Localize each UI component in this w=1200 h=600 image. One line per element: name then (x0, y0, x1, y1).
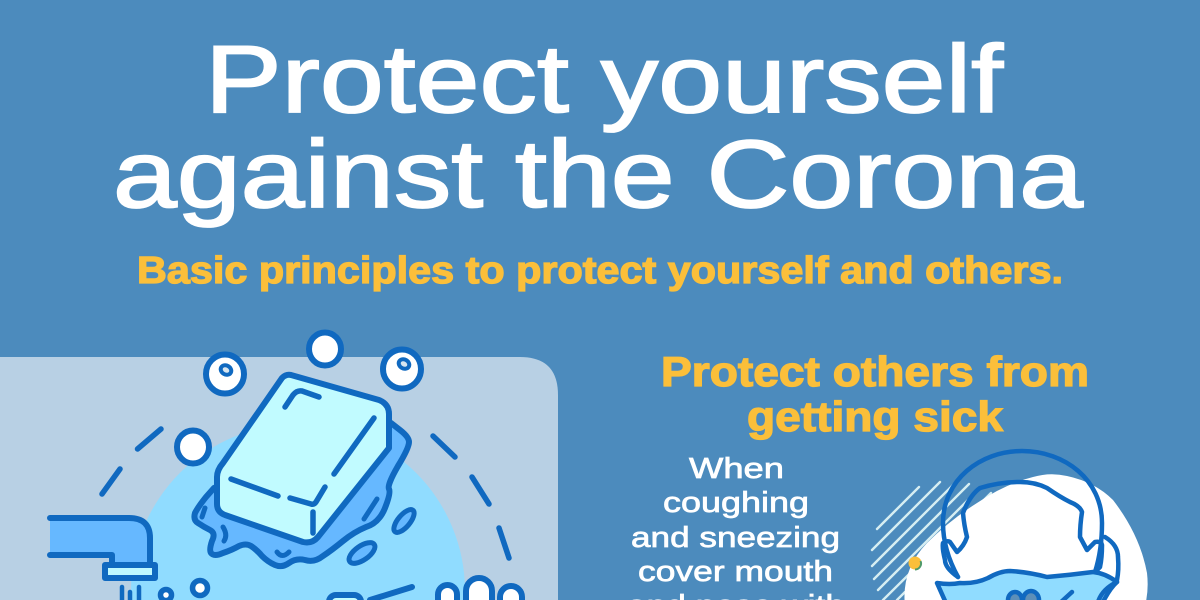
soap bubbles (177, 332, 421, 464)
melting soap puddle (194, 423, 409, 566)
icon: tap (50, 518, 155, 578)
water drops (122, 587, 139, 600)
mask (937, 571, 1117, 600)
heading: protect others: Protect others from (661, 348, 1089, 395)
dashed arc (102, 429, 509, 558)
heading: protect others: getting sick (747, 393, 1004, 440)
icon: soap bar (217, 375, 389, 542)
text block: coughing advice: coughing (663, 487, 809, 519)
hand, partly visible (329, 578, 522, 600)
ear (1105, 537, 1118, 580)
panel: wash hands (0, 357, 558, 600)
title (113, 26, 1084, 228)
text block: coughing advice: cover mouth (638, 556, 833, 588)
drops (390, 506, 418, 536)
text block: coughing advice (627, 453, 845, 600)
puddle details (202, 499, 377, 556)
mask strap (943, 451, 1102, 577)
illustration: soap and tap (50, 332, 522, 600)
background circle (131, 424, 465, 600)
text block: coughing advice: and sneezing (631, 522, 840, 554)
title: Protect yourself (205, 26, 1003, 133)
small bubbles (160, 580, 208, 600)
text block: coughing advice: When (689, 453, 784, 485)
heading: protect others (661, 348, 1089, 440)
subtitle: Basic principles to protect yourself and others. (137, 250, 1063, 292)
white blob (904, 474, 1148, 600)
title: against the Corona (113, 121, 1084, 228)
head outline (943, 482, 1102, 577)
hatching (872, 482, 991, 600)
illustration: person with mask (872, 451, 1148, 600)
yellow dot (908, 556, 922, 570)
